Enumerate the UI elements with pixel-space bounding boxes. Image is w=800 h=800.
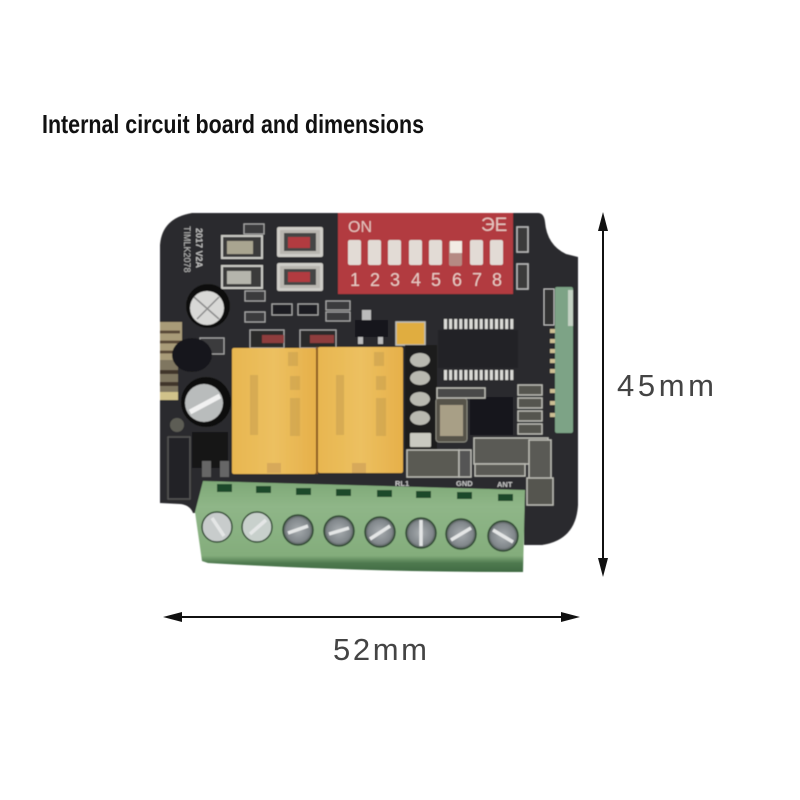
diodes	[262, 335, 334, 343]
push buttons	[277, 227, 323, 291]
crystal	[436, 398, 467, 442]
width label: 52mm	[333, 632, 427, 667]
title: Internal circuit board and dimensions	[42, 109, 424, 139]
dip switch: 4	[411, 270, 421, 290]
dip switch: 6	[452, 270, 462, 290]
electrolytic capacitor top	[186, 284, 230, 328]
board outline	[160, 213, 578, 545]
dip switch	[338, 213, 513, 294]
tantalum capacitor	[396, 322, 425, 345]
dip switch: 5	[431, 270, 441, 290]
dip switch: ЭE	[481, 215, 507, 236]
silkscreen text: 2017 V2A	[194, 228, 204, 269]
silkscreen text: TIMLK2078	[182, 226, 192, 273]
vertical dimension arrow	[598, 212, 608, 577]
transistor	[172, 338, 212, 372]
terminal labels: RL1	[395, 479, 409, 488]
terminal slots	[217, 484, 513, 501]
qfn chip	[470, 397, 513, 435]
silkscreen text	[182, 226, 204, 273]
side resistors by dip switch	[517, 227, 528, 289]
green terminal block	[195, 481, 525, 572]
transistor chip	[355, 310, 388, 344]
relay right	[318, 347, 403, 473]
oval pads	[405, 345, 437, 450]
dip switch: 1	[350, 270, 360, 290]
height label: 45mm	[617, 368, 714, 403]
led pads	[222, 236, 262, 288]
left lower parts	[168, 418, 229, 499]
relay left	[232, 348, 316, 474]
terminal labels: ANT	[497, 480, 513, 489]
circuit board	[160, 213, 578, 572]
dip switch: ON	[348, 219, 372, 236]
green side module	[544, 287, 573, 433]
dip switch: 7	[472, 270, 482, 290]
resistors	[160, 322, 182, 400]
horizontal dimension arrow	[163, 612, 580, 622]
dip switch: 2	[370, 270, 380, 290]
screw slots	[212, 518, 513, 546]
terminal labels: GND	[456, 479, 473, 488]
smd cluster	[407, 385, 553, 505]
dip switch: 3	[390, 270, 400, 290]
dip switch: 8	[492, 270, 502, 290]
terminal labels	[395, 479, 513, 489]
screws	[202, 512, 518, 551]
small smd parts	[200, 224, 350, 354]
electrolytic capacitor bottom	[181, 377, 231, 427]
main ic	[438, 324, 518, 375]
